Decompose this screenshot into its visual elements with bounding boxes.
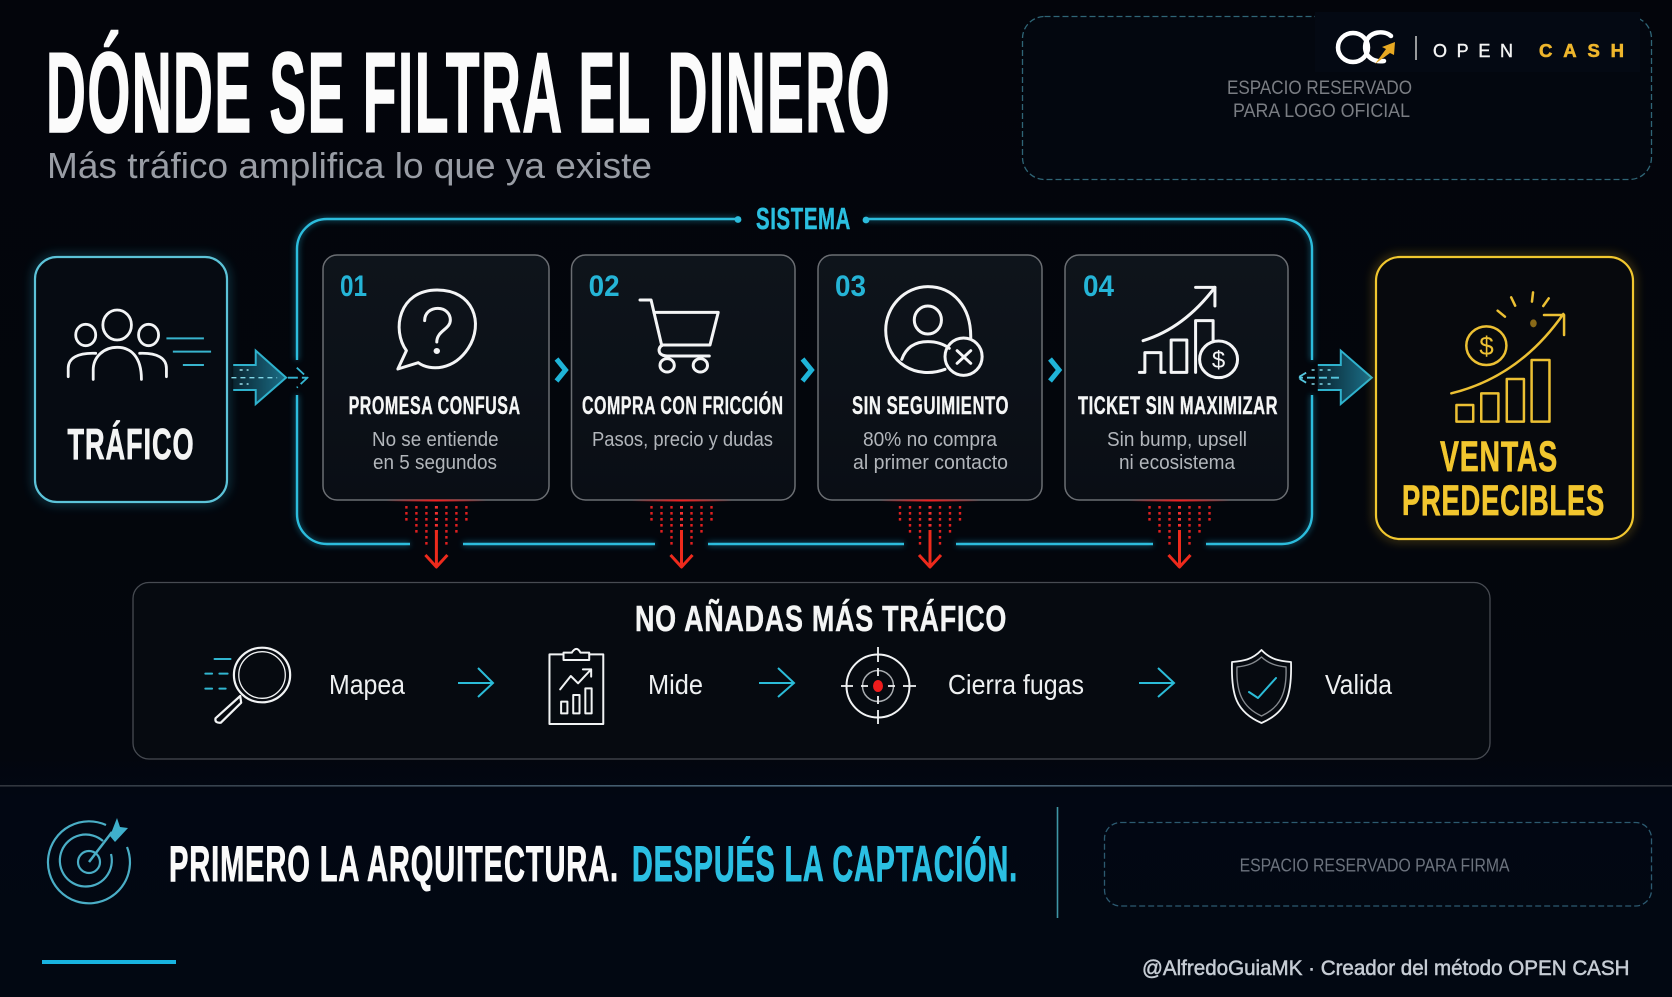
leak 01: [386, 500, 486, 567]
icon: people: [68, 310, 211, 379]
card 02: [572, 255, 795, 500]
heading: NO AÑADAS MÁS TRÁFICO: [635, 597, 1007, 639]
arrow: [458, 668, 493, 697]
logo placeholder text: PARA LOGO OFICIAL: [1233, 101, 1410, 122]
card 04: 04: [1083, 270, 1114, 303]
arrow: tráfico to sistema: [231, 351, 307, 404]
card text: No se entiende: [372, 429, 499, 451]
panel: ventas predecibles: [1376, 257, 1633, 539]
card text: Sin bump, upsell: [1107, 429, 1247, 451]
logo placeholder text: [1227, 78, 1412, 122]
leak 04: [1130, 500, 1230, 567]
card 03: [818, 255, 1042, 500]
logo placeholder text: ESPACIO RESERVADO: [1227, 78, 1412, 99]
step: cierra fugas: Cierra fugas: [948, 669, 1084, 700]
icon: chart with coin: [1139, 287, 1238, 378]
card title: TICKET SIN MAXIMIZAR: [1078, 392, 1278, 420]
statement: DESPUÉS LA CAPTACIÓN.: [632, 836, 1018, 892]
heading: sistema: SISTEMA: [756, 201, 851, 236]
card text: 80% no compra: [863, 429, 998, 451]
logo: open cash: CASH: [1539, 40, 1624, 61]
icon: target: [841, 647, 916, 724]
accent bar: [42, 960, 176, 964]
icon: clipboard: [549, 649, 603, 724]
label: ventas predecibles: VENTAS: [1440, 433, 1558, 481]
logo: open cash: OPEN: [1433, 41, 1513, 61]
icon: question bubble: [398, 290, 475, 369]
card 04: [1065, 255, 1288, 500]
step: mapea: Mapea: [329, 669, 405, 700]
icon: target with arrow: [48, 818, 130, 903]
panel: ventas predecibles: $: [1479, 331, 1494, 361]
icon: growth chart: [1451, 292, 1564, 422]
leak 03: [880, 500, 980, 567]
card 02: 02: [589, 270, 620, 303]
card 04: $: [1212, 347, 1225, 374]
card text: [853, 429, 1008, 474]
panel: sistema frame: [297, 201, 1312, 544]
card title: PROMESA CONFUSA: [349, 392, 521, 420]
card text: ni ecosistema: [1119, 452, 1236, 474]
label: ventas predecibles: [1402, 433, 1605, 525]
logo: open cash: [1338, 32, 1624, 64]
card text: [372, 429, 499, 474]
panel: logo placeholder: [1022, 12, 1652, 180]
arrow: [1139, 668, 1174, 697]
panel: tráfico: [35, 257, 227, 502]
panel: signature placeholder: [1104, 822, 1652, 906]
chevrons between cards: [556, 359, 1059, 381]
card text: al primer contacto: [853, 452, 1008, 474]
card 01: [323, 255, 549, 500]
statement: PRIMERO LA ARQUITECTURA.: [169, 836, 619, 892]
card 01: 01: [340, 270, 367, 303]
panel: no añadas más tráfico: [133, 582, 1490, 759]
arrow: [759, 668, 794, 697]
card 03: 03: [835, 270, 866, 303]
leak 02: [632, 500, 732, 567]
footer credit: @AlfredoGuiaMK · Creador del método OPEN CASH: [1142, 957, 1630, 980]
icon: magnifier: [205, 648, 290, 723]
card title: SIN SEGUIMIENTO: [852, 392, 1009, 420]
panel: signature placeholder: ESPACIO RESERVADO PARA FIRMA: [1240, 856, 1510, 876]
icon: shield: [1232, 650, 1291, 723]
card text: [1107, 429, 1247, 474]
arrow: sistema to ventas: [1298, 351, 1372, 404]
card text: en 5 segundos: [373, 452, 497, 474]
card title: COMPRA CON FRICCIÓN: [582, 390, 784, 420]
icon: person with x: [886, 287, 982, 375]
card text: Pasos, precio y dudas: [592, 429, 773, 451]
label: tráfico: TRÁFICO: [68, 419, 194, 469]
icon: cart: [640, 300, 718, 372]
step: valida: Valida: [1325, 669, 1392, 700]
step: mide: Mide: [648, 669, 703, 700]
subtitle: Más tráfico amplifica lo que ya existe: [47, 145, 652, 186]
